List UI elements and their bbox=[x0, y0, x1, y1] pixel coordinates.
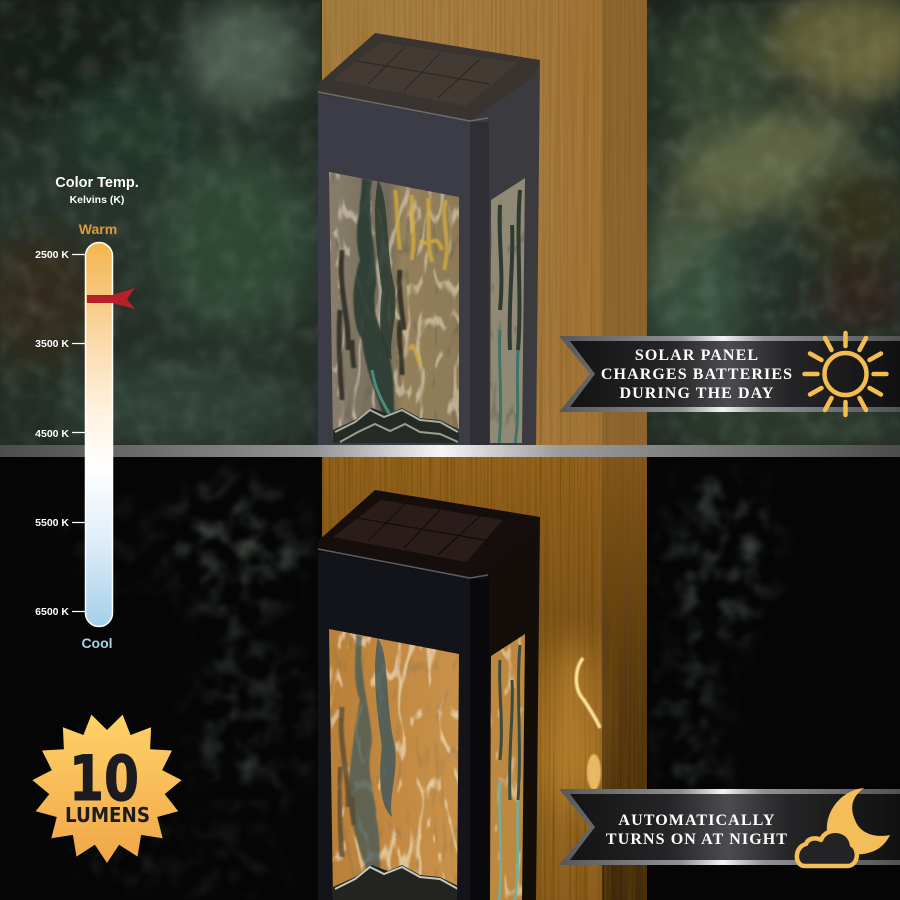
night solar panel bbox=[333, 500, 503, 562]
callout: solar panel banner: DURING THE DAY bbox=[620, 385, 774, 402]
window glass, front bbox=[325, 170, 465, 446]
icon: cloud bbox=[797, 831, 857, 866]
banner text: SOLAR PANEL bbox=[635, 347, 759, 364]
tick labels: 3500 K bbox=[35, 338, 69, 350]
tick labels: 6500 K bbox=[35, 606, 69, 618]
night window glass, front bbox=[325, 627, 465, 900]
lamp cap bbox=[318, 33, 540, 122]
lamp: daytime fixture bbox=[318, 33, 540, 446]
tick labels: 4500 K bbox=[35, 428, 69, 440]
night lamp side face bbox=[470, 517, 540, 900]
callout: solar panel banner bbox=[559, 333, 900, 415]
night ribbon body bbox=[570, 794, 900, 860]
window glass, side bbox=[490, 178, 525, 443]
red marker arrow bbox=[87, 288, 135, 309]
cool label: Cool bbox=[81, 635, 113, 651]
night lamp front face bbox=[318, 550, 470, 900]
callout: night banner bbox=[559, 788, 900, 866]
unit: LUMENS bbox=[65, 803, 150, 827]
callout: solar panel banner: CHARGES BATTERIES bbox=[601, 366, 793, 383]
solar panel bbox=[333, 42, 517, 106]
tick labels bbox=[35, 249, 69, 618]
scale heading: Color Temp. bbox=[55, 175, 139, 191]
night ribbon frame bbox=[559, 789, 900, 865]
number: 10 bbox=[69, 742, 139, 815]
callout: night banner: TURNS ON AT NIGHT bbox=[606, 831, 788, 848]
color temperature scale bbox=[35, 175, 139, 651]
panel: wood post, day bbox=[322, 0, 647, 446]
lamp side face bbox=[470, 60, 540, 446]
divider bar bbox=[0, 445, 900, 457]
lamp front face bbox=[318, 93, 470, 446]
panel: wood post, night bbox=[322, 457, 647, 900]
badge: 10 lumens bbox=[32, 715, 182, 863]
panel: nighttime background foliage bbox=[62, 462, 792, 899]
lamp: nighttime fixture bbox=[318, 490, 540, 900]
ribbon body bbox=[570, 341, 900, 407]
tick labels: 5500 K bbox=[35, 517, 69, 529]
ribbon frame bbox=[559, 336, 900, 412]
night window glass, side bbox=[490, 634, 525, 900]
night lamp cap bbox=[318, 490, 540, 579]
tick labels: 2500 K bbox=[35, 249, 69, 261]
icon: moon bbox=[827, 788, 890, 854]
starburst bbox=[32, 715, 182, 863]
icon: sun bbox=[804, 333, 886, 415]
panel: daytime background foliage bbox=[0, 0, 900, 460]
temperature bar bbox=[86, 242, 112, 626]
night banner text: AUTOMATICALLY bbox=[618, 812, 776, 829]
scale subheading: Kelvins (K) bbox=[70, 194, 124, 206]
warm label: Warm bbox=[79, 221, 117, 237]
